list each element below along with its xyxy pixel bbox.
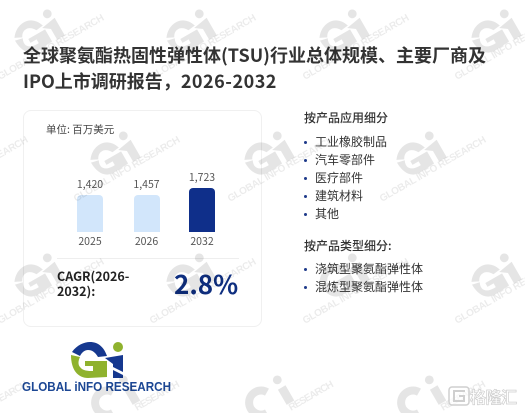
panel: product type segments bbox=[304, 237, 423, 295]
logo: Global Info Research: GLOBAL iNFO RESEARCH bbox=[22, 380, 171, 394]
panel: product type segments: 浇筑型聚氨酯弹性体 bbox=[315, 260, 423, 277]
title: IPO上市调研报告，2026-2032 bbox=[23, 68, 277, 94]
panel: application segments: 按产品应用细分 bbox=[304, 109, 388, 126]
panel: product type segments: 混炼型聚氨酯弹性体 bbox=[315, 278, 423, 295]
badge: Gelonghui watermark: 格隆汇 bbox=[470, 384, 517, 408]
panel: application segments: 医疗部件 bbox=[315, 169, 363, 186]
panel: application segments: 汽车零部件 bbox=[315, 151, 375, 168]
bar 2025 bbox=[77, 177, 103, 249]
watermarks: RESEARCH bbox=[287, 379, 336, 413]
watermarks: GLOBAL INFO RESEARCH bbox=[72, 135, 182, 205]
title bbox=[23, 42, 486, 94]
bar 2025: 1,420 bbox=[77, 177, 103, 192]
panel: application segments bbox=[304, 109, 388, 222]
CAGR label: 2032): bbox=[57, 281, 95, 300]
CAGR value: 2.8% bbox=[174, 265, 238, 302]
bar 2026: 1,457 bbox=[133, 177, 160, 192]
bar 2026: 2026 bbox=[135, 234, 158, 249]
bar 2026 bbox=[133, 177, 160, 249]
watermarks: RESEARCH bbox=[133, 379, 182, 413]
panel: application segments: 工业橡胶制品 bbox=[315, 133, 387, 150]
watermarks: GLOBAL INFO RESEARCH bbox=[226, 135, 336, 205]
CAGR label bbox=[57, 266, 129, 300]
watermarks: GLOBAL INFO RESEARCH bbox=[148, 13, 258, 83]
title: 全球聚氨酯热固性弹性体(TSU)行业总体规模、主要厂商及 bbox=[23, 42, 486, 68]
watermarks: GLOBAL INFO RESEARCH bbox=[378, 135, 488, 205]
panel: product type segments: 按产品类型细分: bbox=[304, 237, 392, 254]
watermarks: RESEARCH bbox=[439, 379, 488, 413]
watermarks: GLOBAL INFO RESEARCH bbox=[301, 13, 411, 83]
panel: application segments: 建筑材料 bbox=[315, 187, 363, 204]
unit label: 单位: 百万美元 bbox=[46, 122, 114, 137]
bar 2025: 2025 bbox=[78, 234, 102, 249]
bar 2032 bbox=[189, 170, 215, 249]
panel: application segments: 其他 bbox=[315, 205, 339, 222]
watermarks: GLOBAL INFO RESEARCH bbox=[301, 257, 411, 327]
panel: market size card bbox=[23, 110, 262, 327]
bar 2032: 1,723 bbox=[189, 170, 215, 185]
watermarks: GLOBAL INFO RESEARCH bbox=[148, 257, 258, 327]
CAGR label: CAGR(2026- bbox=[57, 266, 129, 285]
bar 2032: 2032 bbox=[190, 234, 214, 249]
bar chart bbox=[77, 170, 215, 249]
